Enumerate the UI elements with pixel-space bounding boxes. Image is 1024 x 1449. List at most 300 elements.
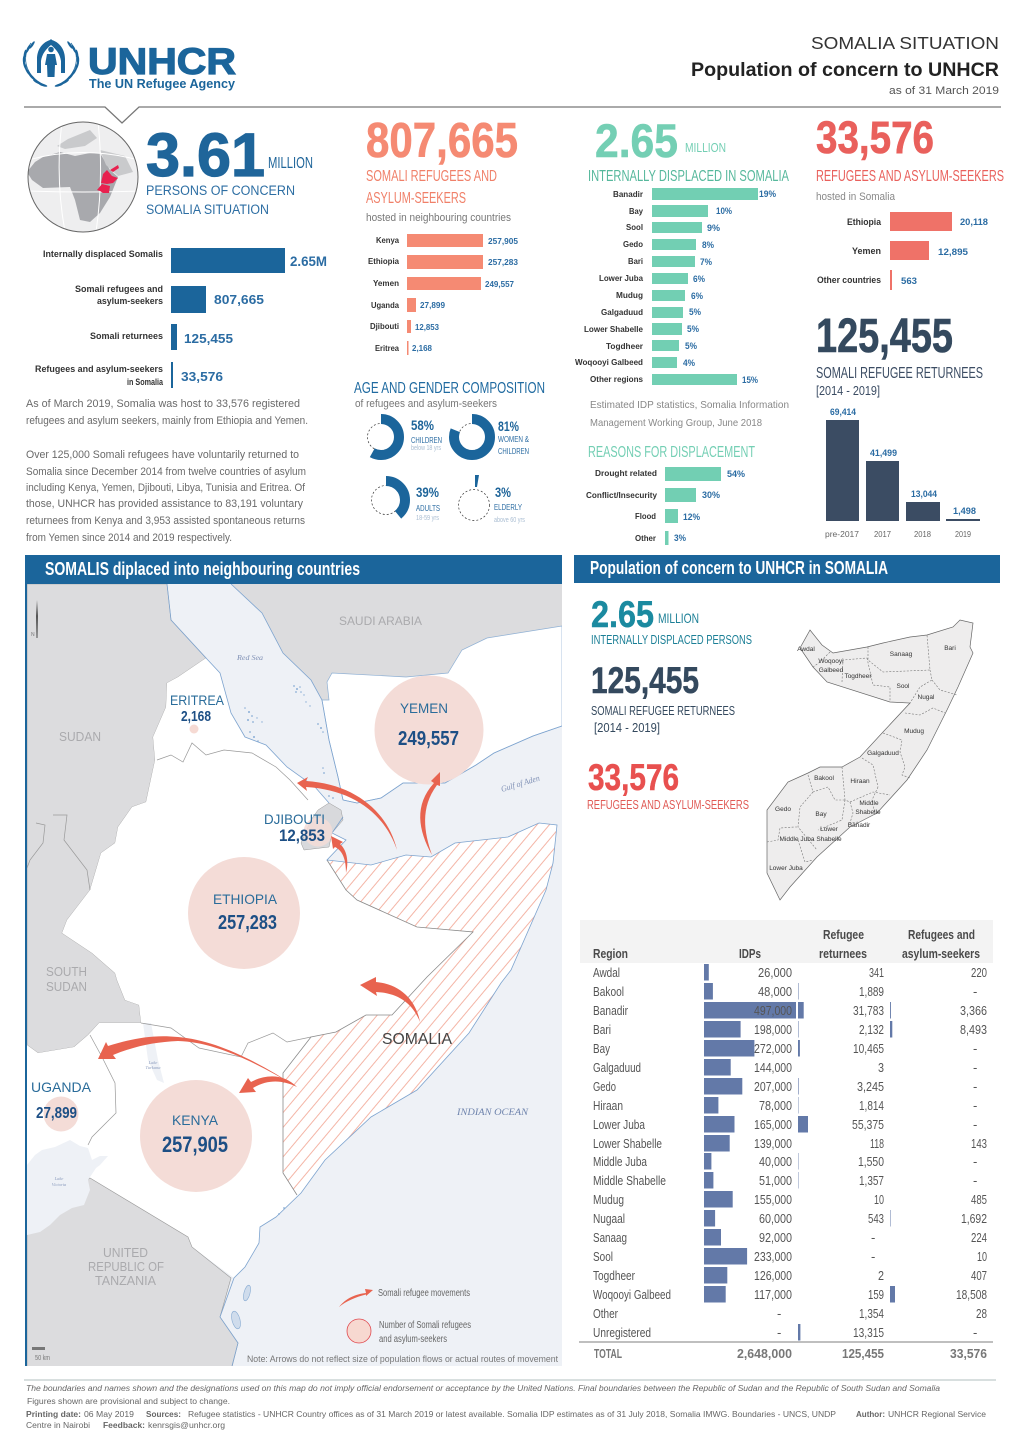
map: Somalia regions: Middle Juba xyxy=(779,836,815,843)
callout: Djibouti: 12,853 xyxy=(279,826,325,845)
total persons of concern stat xyxy=(146,121,313,217)
callout: Ethiopia xyxy=(188,857,300,969)
map: regional displacement: SOUTH xyxy=(46,964,87,979)
Djibouti xyxy=(301,803,343,850)
bar chart: host countries: Uganda xyxy=(371,301,400,310)
callout: Kenya xyxy=(140,1080,252,1192)
bar chart: IDPs by region: Banadir xyxy=(613,189,644,199)
bar chart: IDPs by region: 5% xyxy=(687,324,699,334)
row: Bari: 198,000 xyxy=(754,1022,792,1037)
row: Bay: 10,465 xyxy=(853,1041,884,1056)
row: Unregistered xyxy=(593,1325,977,1340)
row: Lower Shabelle: 143 xyxy=(971,1136,987,1151)
panel: Somali refugees in neighbouring countries xyxy=(366,114,518,355)
bar chart: host countries xyxy=(368,234,518,355)
chart: women and children donut: WOMEN & xyxy=(498,434,529,444)
row: Other: 1,354 xyxy=(859,1306,884,1321)
row: Bari xyxy=(593,1022,987,1037)
row: Mudug: 155,000 xyxy=(754,1192,792,1207)
row: Awdal: 26,000 xyxy=(758,965,792,980)
panel: age and gender composition xyxy=(354,380,545,524)
text block: IDP source note xyxy=(590,399,789,429)
north arrow: N xyxy=(31,632,35,638)
bar chart: reasons for displacement: 30% xyxy=(702,490,720,500)
row: Bakool: - xyxy=(973,984,977,999)
map: Somalia regions: Nugal xyxy=(918,694,935,701)
north arrow xyxy=(31,600,38,638)
row: Lower Shabelle xyxy=(593,1136,987,1151)
bar chart: IDPs by region: Togdheer xyxy=(606,341,644,351)
bar chart: refugees by origin: Yemen xyxy=(852,246,881,256)
header title: Population of concern to UNHCR xyxy=(691,60,999,81)
text block: narrative xyxy=(26,398,308,544)
map: regional displacement: REPUBLIC OF xyxy=(88,1259,164,1274)
text block: IDP source note: Estimated IDP statistics, Somalia Information xyxy=(590,399,789,411)
bar chart: IDPs by region: Other regions xyxy=(590,374,643,384)
row: Banadir: 3,366 xyxy=(960,1003,987,1018)
row: Other: Other xyxy=(593,1306,619,1321)
chart: elderly donut xyxy=(458,475,525,524)
bar chart: population groups: asylum-seekers xyxy=(97,296,163,306)
row: Togdheer xyxy=(593,1268,987,1283)
row: Gedo: 207,000 xyxy=(754,1079,792,1094)
chart: children donut: 58% xyxy=(411,417,434,433)
arrow: to Yemen xyxy=(420,772,440,855)
scale bar: 50 km xyxy=(35,1355,50,1362)
row: Mudug: 10 xyxy=(874,1192,884,1207)
Lake Turkana xyxy=(143,1023,164,1083)
bar chart: host countries: Ethiopia xyxy=(368,257,400,266)
arrow: to Ethiopia via Djibouti coast xyxy=(297,777,397,850)
logo: UNHCR: UNHCR xyxy=(88,41,236,82)
country names: SAUDI ARABIA xyxy=(339,614,422,628)
bar chart: reasons for displacement: Flood xyxy=(635,511,656,521)
arrow: to Uganda xyxy=(98,1036,297,1087)
footer: disclaimer and sources: The boundaries and names shown and the designations used on this map do not imply official endorsement or acceptance by the United Nations. Final boundaries between the Republic of Sudan and the Republic of South Sudan and Somalia xyxy=(26,1384,941,1393)
text block: narrative: including Kenya, Yemen, Djibouti, Libya, Tunisia and Eritrea. Of xyxy=(26,482,306,494)
bar chart: IDPs by region: 19% xyxy=(759,189,776,199)
row: Bay: - xyxy=(973,1041,977,1056)
row: Banadir: 497,000 xyxy=(754,1003,792,1018)
chart: children donut: below 18 yrs xyxy=(411,445,441,452)
chart: adults donut xyxy=(367,481,440,522)
panel: key figures in Somalia xyxy=(587,594,752,812)
bar chart: returnees by year: 13,044 xyxy=(911,489,937,499)
row: Mudug xyxy=(593,1192,987,1207)
map: Somalia regions: Bay xyxy=(815,811,827,818)
chart: women and children donut: 81% xyxy=(498,418,519,434)
text block: IDP source note: Management Working Group, June 2018 xyxy=(590,417,762,429)
map: Somalia regions: Shabelle xyxy=(816,836,842,843)
bar chart: returnees by year: 41,499 xyxy=(870,448,897,458)
panel: refugee returnees xyxy=(816,310,983,539)
bar chart: IDPs by region xyxy=(575,188,776,385)
callout: Eritrea: 2,168 xyxy=(181,708,211,725)
row: Gedo: 3,245 xyxy=(857,1079,884,1094)
callout: Yemen: 249,557 xyxy=(398,728,459,750)
row: Bari: 8,493 xyxy=(960,1022,987,1037)
row: Galgaduud: 144,000 xyxy=(754,1060,792,1075)
row: Gedo: - xyxy=(973,1079,977,1094)
bar chart: reasons for displacement: 3% xyxy=(674,533,686,543)
bar chart: IDPs by region: Bay xyxy=(629,206,643,216)
bar chart: IDPs by region: 6% xyxy=(691,291,703,301)
row: Middle Juba: Middle Juba xyxy=(593,1154,648,1169)
bar chart: reasons for displacement: 12% xyxy=(683,512,700,522)
panel: Somali refugees in neighbouring countries: SOMALI REFUGEES AND xyxy=(366,168,497,185)
header title: SOMALIA SITUATION xyxy=(811,33,999,53)
bar chart: host countries: Djibouti xyxy=(370,322,399,331)
row: Middle Shabelle: - xyxy=(973,1173,977,1188)
bar chart: IDPs by region: Galgaduud xyxy=(601,307,643,317)
row: Togdheer: Togdheer xyxy=(593,1268,636,1283)
row: Middle Juba: 40,000 xyxy=(759,1154,792,1169)
row: Unregistered: - xyxy=(973,1325,977,1340)
row: Nugaal: Nugaal xyxy=(593,1211,625,1226)
row: Togdheer: 2 xyxy=(878,1268,884,1283)
panel: key figures in Somalia: SOMALI REFUGEE RETURNEES xyxy=(591,703,735,718)
row: Hiraan: Hiraan xyxy=(593,1098,623,1113)
bar chart: host countries: 12,853 xyxy=(415,322,439,332)
map: regional displacement: Lake xyxy=(54,1176,63,1181)
row: Sanaag xyxy=(593,1230,987,1245)
arrow: to Kenya xyxy=(239,1076,297,1093)
icon: globe xyxy=(27,122,138,232)
row: Total: 125,455 xyxy=(842,1346,884,1361)
panel: IDPs in Somalia xyxy=(575,114,789,545)
bar chart: refugees by origin: Ethiopia xyxy=(847,217,882,227)
islands xyxy=(244,685,334,1215)
row: Hiraan: 1,814 xyxy=(859,1098,884,1113)
row: Mudug: 485 xyxy=(971,1192,987,1207)
callout: Yemen: YEMEN xyxy=(400,700,448,716)
panel: refugees in Somalia: 33,576 xyxy=(816,112,934,163)
row: Galgaduud: - xyxy=(973,1060,977,1075)
row: Lower Juba: - xyxy=(973,1117,977,1132)
map: Somalia regions: Galgaduud xyxy=(867,750,899,757)
row: Togdheer: 126,000 xyxy=(754,1268,792,1283)
map: Somalia regions: Hiraan xyxy=(850,778,870,785)
map: regional displacement: Turkana xyxy=(145,1065,161,1070)
row: Sool: Sool xyxy=(593,1249,613,1264)
row: Bakool: 1,889 xyxy=(859,984,884,999)
bar chart: reasons for displacement: REASONS FOR DISPLACEMENT xyxy=(588,444,755,461)
panel: IDPs in Somalia: 2.65 xyxy=(595,114,678,167)
Sudan and western land xyxy=(27,584,206,1053)
row: Lower Juba: 165,000 xyxy=(754,1117,792,1132)
text block: narrative: Over 125,000 Somali refugees have voluntarily returned to xyxy=(26,449,299,461)
bar chart: reasons for displacement: Drought related xyxy=(595,468,657,478)
bar chart: host countries: Kenya xyxy=(376,236,400,245)
row: Sool xyxy=(593,1249,987,1264)
footer: disclaimer and sources: kenrsgis@unhcr.org xyxy=(148,1421,225,1430)
bar chart: refugees by origin: 563 xyxy=(901,276,917,287)
row: Total: 2,648,000 xyxy=(737,1346,792,1361)
map: Somalia regions: Lower xyxy=(820,826,839,833)
heading: population in Somalia band: Population of concern to UNHCR in SOMALIA xyxy=(590,558,888,578)
icon: laurel wreath with sheltered person xyxy=(22,39,80,88)
map note: Note: Arrows do not reflect size of population flows or actual routes of movement xyxy=(247,1354,558,1364)
row: Lower Juba: Lower Juba xyxy=(593,1117,646,1132)
total persons of concern stat: 3.61 xyxy=(146,121,265,189)
coast lines xyxy=(167,584,562,1366)
map frame xyxy=(25,584,27,1366)
row: Bay xyxy=(593,1041,977,1056)
bar chart: IDPs by region: Bari xyxy=(628,256,643,266)
row: Banadir xyxy=(593,1003,987,1018)
label: Somalia: SOMALIA xyxy=(382,1031,452,1048)
footer: disclaimer and sources: 06 May 2019 xyxy=(84,1410,135,1419)
map: Somalia regions: Middle xyxy=(859,800,879,807)
Lake Victoria xyxy=(27,1140,108,1235)
row: Awdal: Awdal xyxy=(593,965,620,980)
row: Sanaag: 224 xyxy=(971,1230,987,1245)
callout: Ethiopia: ETHIOPIA xyxy=(213,891,278,907)
row: Woqooyi Galbeed xyxy=(593,1287,987,1302)
row: Lower Shabelle: 118 xyxy=(870,1136,884,1151)
map: regional displacement xyxy=(25,584,562,1367)
row: Middle Juba: 1,550 xyxy=(858,1154,884,1169)
row: Bakool: 48,000 xyxy=(758,984,792,999)
Yemen xyxy=(322,626,562,803)
row: Gedo: Gedo xyxy=(593,1079,616,1094)
panel: key figures in Somalia: 2.65 xyxy=(591,594,654,635)
row: Sool: - xyxy=(871,1249,875,1264)
bar chart: IDPs by region: Gedo xyxy=(623,239,643,249)
row: Galgaduud: 3 xyxy=(878,1060,884,1075)
legend: Somali refugee movements xyxy=(378,1288,470,1299)
row: Sool: 10 xyxy=(977,1249,987,1264)
bar chart: IDPs by region: 15% xyxy=(742,375,758,385)
row: Hiraan: 78,000 xyxy=(759,1098,792,1113)
chart: elderly donut: above 60 yrs xyxy=(494,517,525,524)
chart: children donut: CHILDREN xyxy=(411,435,442,445)
panel: Somali refugees in neighbouring countries: hosted in neighbouring countries xyxy=(366,212,511,224)
row: Middle Shabelle: 51,000 xyxy=(759,1173,792,1188)
panel: IDPs in Somalia: INTERNALLY DISPLACED IN SOMALIA xyxy=(588,168,789,185)
footer: disclaimer and sources: UNHCR Regional Service xyxy=(888,1410,987,1419)
logo: UNHCR: The UN Refugee Agency xyxy=(89,77,235,91)
callout: Eritrea: ERITREA xyxy=(170,692,225,708)
map: Somalia regions: Galbeed xyxy=(819,667,844,674)
row: Woqooyi Galbeed: 159 xyxy=(868,1287,884,1302)
map: regional displacement: Lake xyxy=(148,1060,157,1065)
header title xyxy=(691,33,999,97)
table: population by region: IDPs xyxy=(739,946,761,961)
map: Somalia regions: Mudug xyxy=(904,728,924,735)
map: Somalia regions: Lower Juba xyxy=(769,865,803,872)
row: Lower Juba: 55,375 xyxy=(852,1117,884,1132)
row: Other: 28 xyxy=(976,1306,987,1321)
row: Lower Shabelle: Lower Shabelle xyxy=(593,1136,662,1151)
row: Banadir: Banadir xyxy=(593,1003,629,1018)
bar chart: IDPs by region: 5% xyxy=(685,341,697,351)
bar chart: IDPs by region: 7% xyxy=(700,257,712,267)
table: population by region: Refugees and xyxy=(908,927,975,942)
table: population by region: asylum-seekers xyxy=(902,946,980,961)
map: Somalia regions: Awdal xyxy=(797,646,815,653)
chart: children donut xyxy=(363,417,442,455)
callout: Yemen xyxy=(374,676,484,784)
legend: Number of Somali refugees xyxy=(379,1320,471,1331)
chart: elderly donut: 3% xyxy=(495,484,511,500)
row: Sool: 233,000 xyxy=(754,1249,792,1264)
bar chart: host countries: 2,168 xyxy=(412,343,432,353)
bar chart: refugees by origin: 20,118 xyxy=(960,217,988,228)
callout: Ethiopia: 257,283 xyxy=(218,912,277,934)
row: Banadir: 31,783 xyxy=(853,1003,884,1018)
footer: disclaimer and sources: Refugee statistics - UNHCR Country offices as of 31 March 2019 or latest available. Somalia IDP estimates as of 31 July 2018, Somalia IMWG. Boundaries - UNCS, UNDP xyxy=(188,1410,836,1419)
bar chart: refugees by origin xyxy=(817,212,988,290)
row: Sanaag: 92,000 xyxy=(759,1230,792,1245)
row: Total: TOTAL xyxy=(594,1346,622,1361)
bar chart: reasons for displacement: 54% xyxy=(727,469,745,479)
row: Middle Shabelle xyxy=(593,1173,977,1188)
text block: narrative: returnees from Kenya and 3,953 assisted spontaneous returns xyxy=(26,515,305,527)
text block: narrative: those, UNHCR has provided assistance to 83,191 voluntary xyxy=(26,498,303,510)
panel: refugees in Somalia: hosted in Somalia xyxy=(816,191,896,203)
map: Somalia regions: Sool xyxy=(896,683,910,690)
panel: Somali refugees in neighbouring countries: 807,665 xyxy=(366,114,518,168)
panel: age and gender composition: of refugees and asylum-seekers xyxy=(355,398,497,410)
bar chart: IDPs by region: Sool xyxy=(626,222,643,232)
table: population by region: returnees xyxy=(819,946,867,961)
bar chart: population groups: Refugees and asylum-seekers xyxy=(35,364,163,374)
row: Sanaag: Sanaag xyxy=(593,1230,627,1245)
chart: women and children donut xyxy=(454,418,529,456)
callout: Djibouti xyxy=(264,811,332,846)
bar chart: population groups xyxy=(35,248,327,388)
bar chart: host countries: 249,557 xyxy=(485,279,514,289)
bar chart: IDPs by region: 6% xyxy=(693,274,705,284)
chart: women and children donut: CHILDREN xyxy=(498,446,529,456)
row: Other: - xyxy=(777,1306,781,1321)
bar chart: population groups: 807,665 xyxy=(214,292,264,307)
panel: key figures in Somalia: MILLION xyxy=(658,610,699,626)
bar chart: host countries: Eritrea xyxy=(375,344,400,353)
row: Bay: 272,000 xyxy=(754,1041,792,1056)
bar chart: returnees by year: 69,414 xyxy=(830,407,856,417)
bar chart: reasons for displacement: Conflict/Insecurity xyxy=(586,490,657,500)
footer: disclaimer and sources: Sources: xyxy=(146,1410,181,1419)
callout: Uganda xyxy=(31,1079,92,1132)
footer: disclaimer and sources: Centre in Nairobi xyxy=(26,1421,90,1430)
bar chart: population groups: Somali returnees xyxy=(90,331,163,341)
row: Nugaal: 543 xyxy=(868,1211,884,1226)
callout: Uganda: UGANDA xyxy=(31,1079,92,1095)
header title: as of 31 March 2019 xyxy=(889,85,999,97)
map: regional displacement: Red Sea xyxy=(236,653,263,662)
Tanzania xyxy=(27,1178,238,1367)
bar chart: host countries: 27,899 xyxy=(420,300,445,310)
Horn and East Africa land xyxy=(27,658,557,1278)
row: Togdheer: 407 xyxy=(971,1268,987,1283)
row: Nugaal: 60,000 xyxy=(759,1211,792,1226)
footer: disclaimer and sources xyxy=(26,1384,987,1430)
text block: narrative: As of March 2019, Somalia was host to 33,576 registered xyxy=(26,398,300,410)
row: Nugaal xyxy=(593,1211,987,1226)
row: Woqooyi Galbeed: 18,508 xyxy=(956,1287,987,1302)
row: Bari: 2,132 xyxy=(859,1022,884,1037)
map: Somalia regions: Bakool xyxy=(814,775,834,782)
panel: refugee returnees: 125,455 xyxy=(816,310,953,363)
row: Lower Juba xyxy=(593,1117,977,1132)
row: Galgaduud: Galgaduud xyxy=(593,1060,641,1075)
bar chart: reasons for displacement xyxy=(586,444,755,545)
text block: narrative: Somalia since December 2014 from twelve countries of asylum xyxy=(26,466,306,478)
bar chart: returnees by year: 2018 xyxy=(914,529,931,539)
panel: key figures in Somalia: INTERNALLY DISPLACED PERSONS xyxy=(591,632,752,647)
Saudi Arabia and northern land xyxy=(231,584,562,700)
row: Middle Juba xyxy=(593,1154,977,1169)
panel: key figures in Somalia: [2014 - 2019] xyxy=(594,720,660,735)
bar chart: population groups: Internally displaced Somalis xyxy=(43,249,163,259)
bar chart: host countries: 257,905 xyxy=(488,236,518,246)
panel: refugee returnees: [2014 - 2019] xyxy=(816,383,880,398)
bar chart: population groups: Somali refugees and xyxy=(75,284,163,294)
row: Bakool: Bakool xyxy=(593,984,624,999)
footer: disclaimer and sources: Author: xyxy=(856,1410,885,1419)
row: Unregistered: Unregistered xyxy=(593,1325,651,1340)
bar chart: IDPs by region: 9% xyxy=(707,223,720,233)
row: Middle Shabelle: Middle Shabelle xyxy=(593,1173,666,1188)
bar chart: IDPs by region: 4% xyxy=(683,358,695,368)
row: Sanaag: - xyxy=(871,1230,875,1245)
row: Bakool xyxy=(593,984,977,999)
row: Galgaduud xyxy=(593,1060,977,1075)
row: Nugaal: 1,692 xyxy=(961,1211,987,1226)
bar chart: host countries: Yemen xyxy=(373,279,399,288)
bar chart: IDPs by region: Mudug xyxy=(616,290,643,300)
row: Bari: Bari xyxy=(593,1022,611,1037)
map: regional displacement: Gulf of Aden xyxy=(500,773,541,794)
callout: Djibouti: DJIBOUTI xyxy=(264,811,325,827)
bar chart: population groups: in Somalia xyxy=(127,377,164,387)
table: population by region xyxy=(579,920,993,1361)
bar chart: IDPs by region: 10% xyxy=(716,206,732,216)
total persons of concern stat: MILLION xyxy=(268,155,313,172)
map: regional displacement: Victoria xyxy=(52,1182,67,1187)
footer: disclaimer and sources: Feedback: xyxy=(103,1421,145,1430)
map: Somalia regions: Sanaag xyxy=(890,651,913,658)
scale bar xyxy=(32,1347,50,1362)
arrow: to Ethiopia xyxy=(360,977,420,1022)
total persons of concern stat: SOMALIA SITUATION xyxy=(146,202,269,217)
Somalia hatched area xyxy=(283,823,557,1195)
row: Middle Shabelle: 1,357 xyxy=(859,1173,884,1188)
logo: UNHCR xyxy=(22,39,236,91)
legend: and asylum-seekers xyxy=(379,1334,447,1345)
row: Hiraan: - xyxy=(973,1098,977,1113)
bar chart: refugees by origin: Other countries xyxy=(817,275,881,285)
map: regional displacement: UNITED xyxy=(103,1245,148,1260)
bar chart: returnees by year: pre-2017 xyxy=(825,529,859,539)
bar chart: IDPs by region: Lower Shabelle xyxy=(584,324,643,334)
bar chart: returnees by year: 2019 xyxy=(955,529,971,539)
bar chart: IDPs by region: Lower Juba xyxy=(599,273,643,283)
bar chart: returnees by year xyxy=(825,407,980,539)
callout: Eritrea xyxy=(170,692,225,734)
row: Unregistered: 13,315 xyxy=(853,1325,884,1340)
panel: refugees in Somalia xyxy=(816,112,1004,290)
row: Woqooyi Galbeed: Woqooyi Galbeed xyxy=(593,1287,671,1302)
panel: key figures in Somalia: REFUGEES AND ASYLUM-SEEKERS xyxy=(587,797,749,812)
row: Lower Shabelle: 139,000 xyxy=(754,1136,792,1151)
callout: Kenya: 257,905 xyxy=(162,1132,228,1157)
map: regional displacement: SUDAN xyxy=(59,729,101,744)
map: regional displacement: TANZANIA xyxy=(95,1273,156,1288)
bar chart: IDPs by region: 5% xyxy=(689,307,701,317)
